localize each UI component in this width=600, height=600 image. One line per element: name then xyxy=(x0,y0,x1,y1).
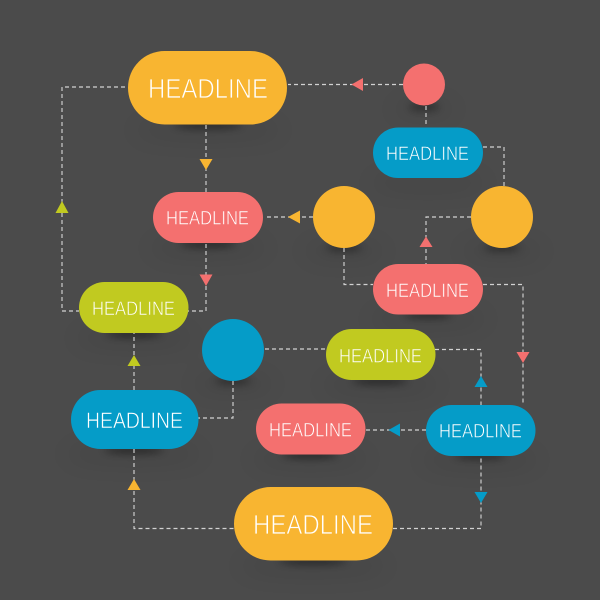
node: yellow circle right xyxy=(471,186,533,248)
node: green left xyxy=(79,282,188,333)
arrow: left red xyxy=(352,78,363,91)
node: red second: HEADLINE xyxy=(166,208,249,230)
arrow: down yellow xyxy=(200,159,212,170)
arrow: up green, left line xyxy=(56,201,68,213)
dashed connectors xyxy=(62,84,523,528)
node: blue top xyxy=(373,128,483,178)
arrow: up green, center xyxy=(128,355,140,366)
node: green right xyxy=(326,329,436,380)
node: red circle xyxy=(403,64,445,106)
node: large yellow top: HEADLINE xyxy=(148,73,268,104)
node: large yellow bottom xyxy=(234,487,393,560)
node: blue right xyxy=(426,405,536,456)
arrow: left yellow xyxy=(288,210,300,224)
node: blue left: HEADLINE xyxy=(86,408,183,433)
node: blue right: HEADLINE xyxy=(439,422,522,442)
arrow: down red xyxy=(200,274,212,286)
node: blue top: HEADLINE xyxy=(386,144,469,165)
node: blue left xyxy=(71,390,198,449)
node: large yellow bottom: HEADLINE xyxy=(253,509,373,540)
node: blue circle xyxy=(202,319,264,381)
node: yellow circle left xyxy=(313,186,375,248)
node: red right xyxy=(373,264,483,314)
arrow: up blue xyxy=(474,376,488,387)
arrow: up red xyxy=(420,236,432,247)
node: red second xyxy=(153,192,263,243)
node: green right: HEADLINE xyxy=(339,346,422,368)
node: red bottom: HEADLINE xyxy=(269,420,352,442)
arrow: down blue xyxy=(474,492,488,503)
node: red bottom xyxy=(256,404,366,454)
node: red right: HEADLINE xyxy=(386,281,469,302)
drop shadows xyxy=(64,102,544,575)
node: large yellow top xyxy=(128,51,287,124)
node: green left: HEADLINE xyxy=(92,299,175,320)
arrow: down red, right line xyxy=(516,352,530,363)
arrow: up yellow xyxy=(128,479,140,490)
arrow: left blue xyxy=(388,424,400,436)
